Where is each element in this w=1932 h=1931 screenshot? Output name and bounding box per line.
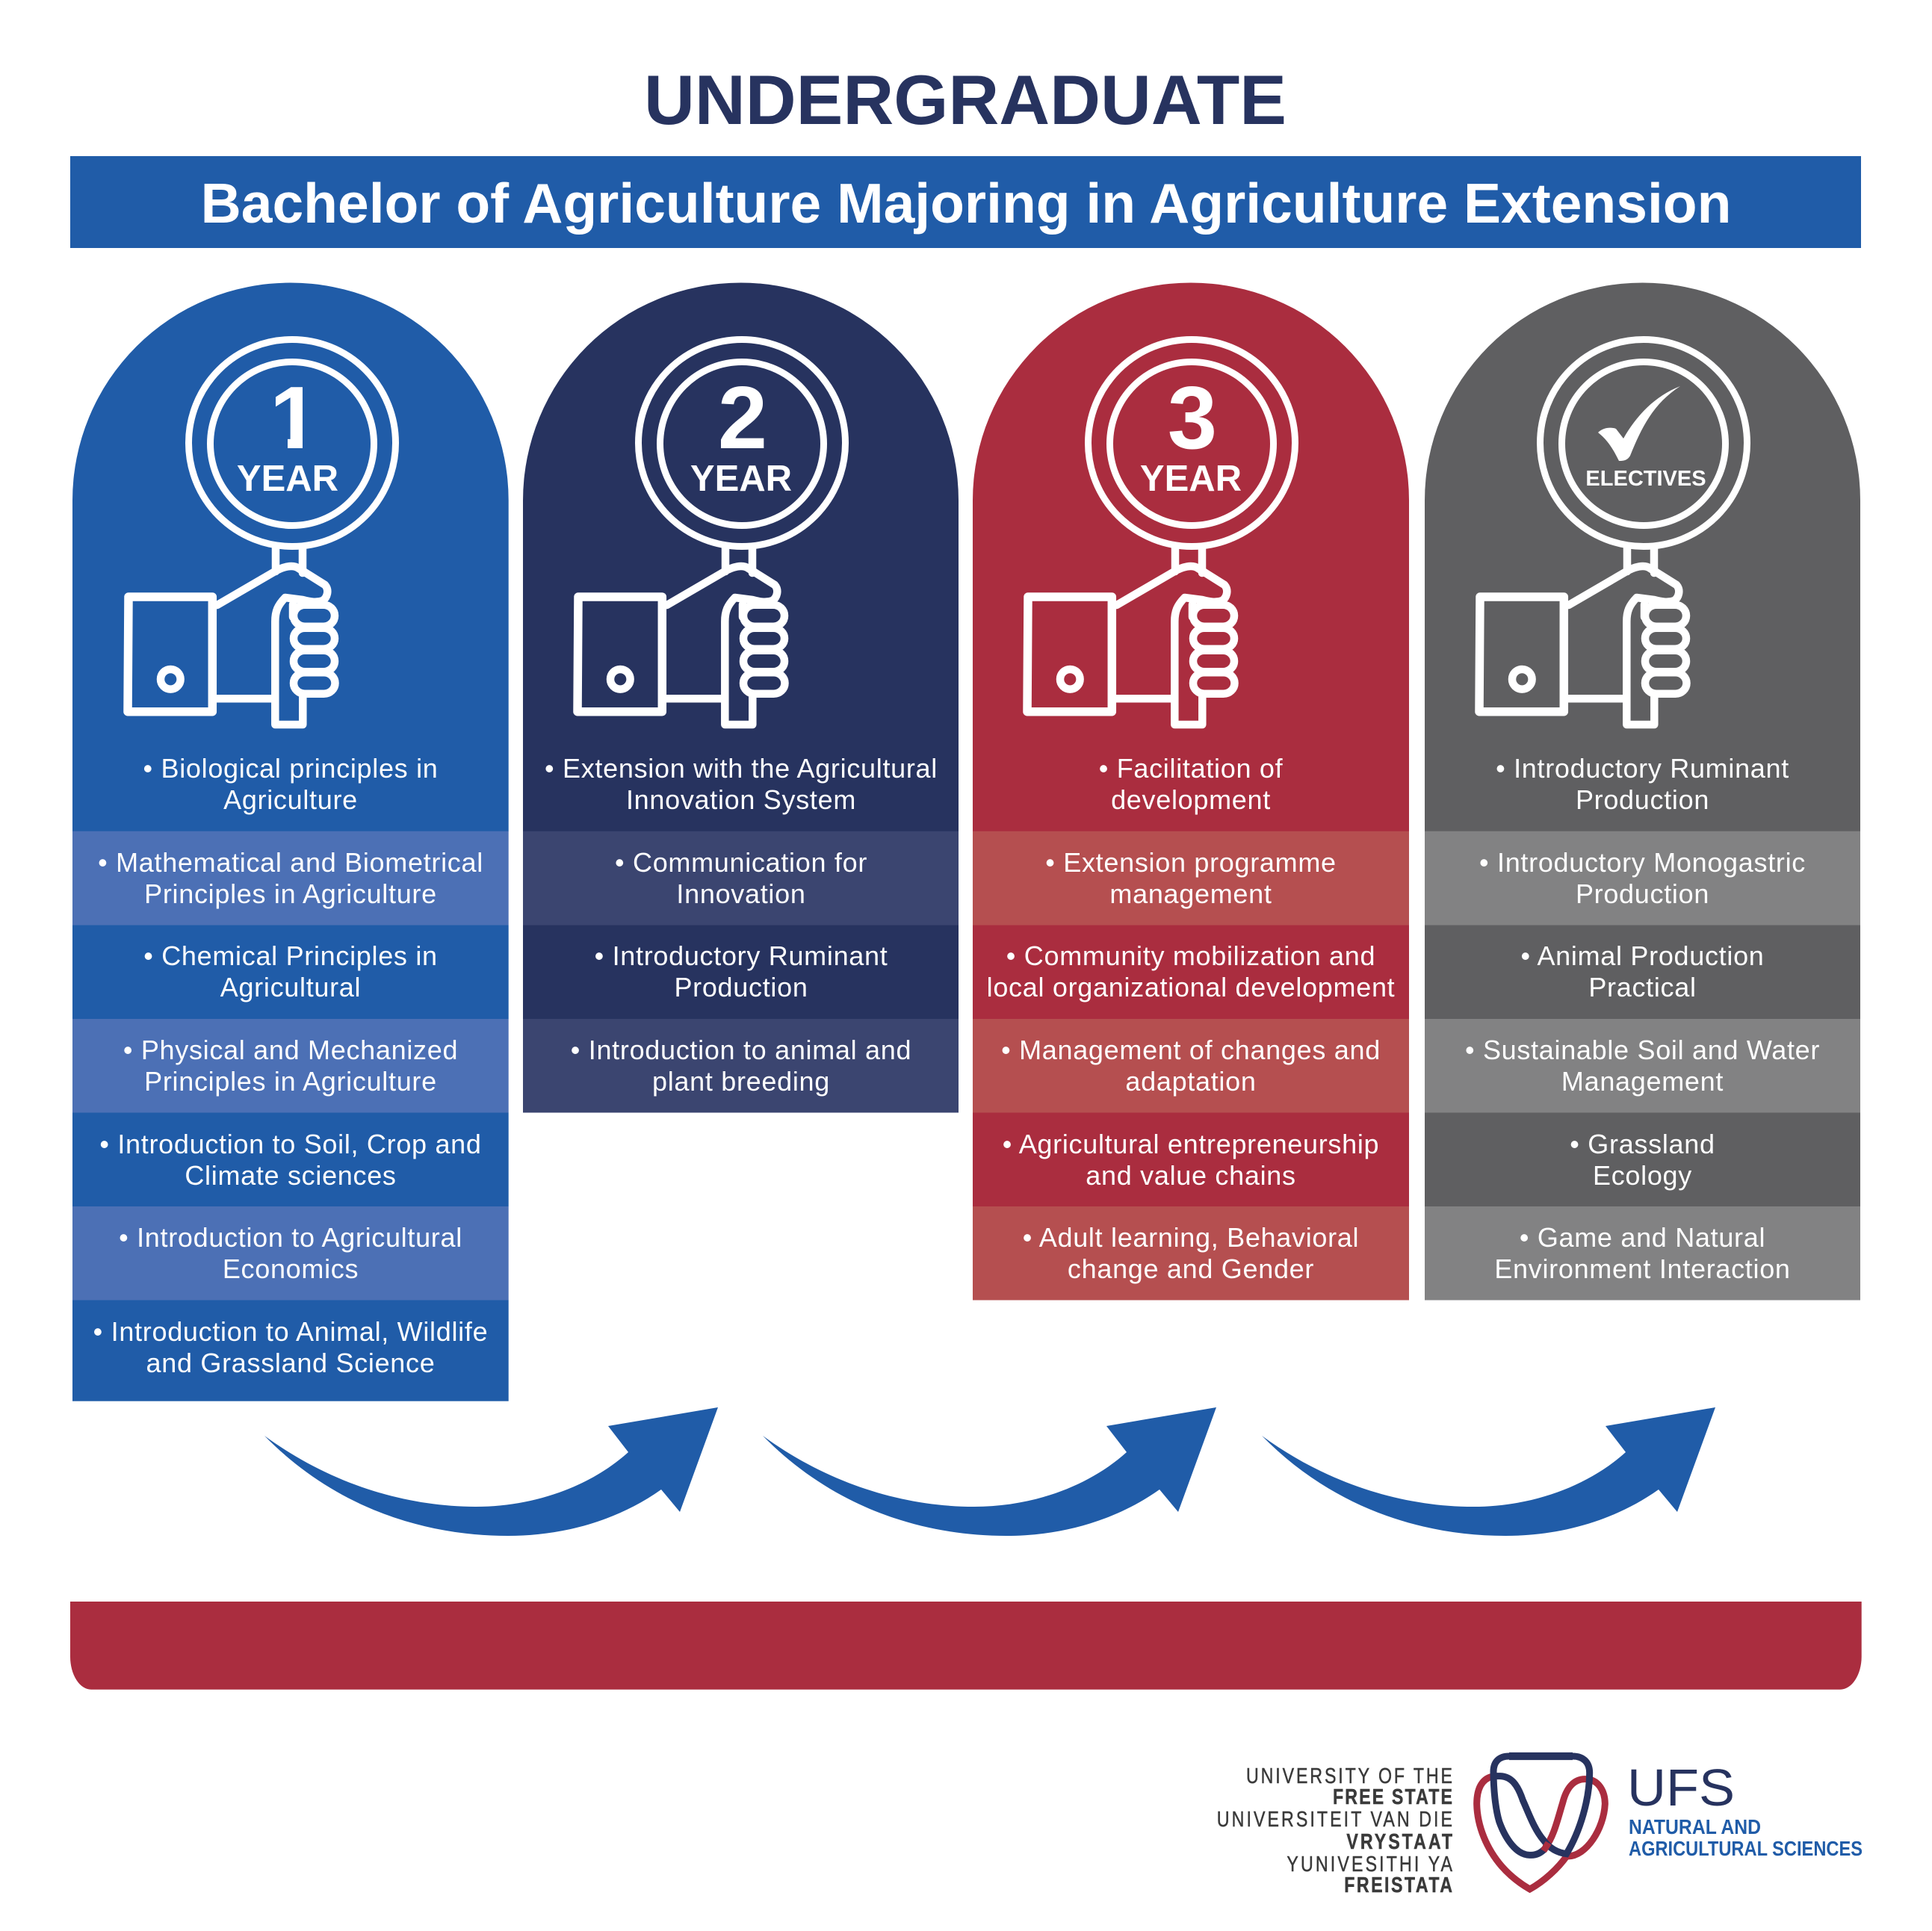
course list: year 1: Principles in Agriculture bbox=[144, 878, 437, 909]
icon: magnifier held in hand, year 2: YEAR bbox=[690, 459, 792, 499]
course list: year 1: • Introduction to Animal, Wildlife bbox=[93, 1316, 488, 1347]
icon: magnifier held in hand, year 3 bbox=[1027, 339, 1295, 725]
icon: magnifier held in hand with check mark, electives: ELECTIVES bbox=[1585, 467, 1706, 491]
icon: magnifier held in hand with check mark, electives bbox=[1479, 339, 1747, 725]
logo: faculty name: NATURAL AND bbox=[1629, 1815, 1761, 1838]
course list: electives: Environment Interaction bbox=[1494, 1253, 1791, 1284]
course list: year 3: • Management of changes and bbox=[1001, 1035, 1381, 1065]
course list: year 1 bbox=[93, 753, 488, 1378]
banner: programme name bbox=[70, 156, 1861, 248]
course list: year 2: • Communication for bbox=[615, 847, 867, 878]
course list: year 1: • Biological principles in bbox=[143, 753, 438, 784]
course list: electives: Management bbox=[1561, 1066, 1724, 1097]
logo: university name: VRYSTAAT bbox=[1346, 1829, 1452, 1854]
logo: faculty name: AGRICULTURAL SCIENCES bbox=[1629, 1837, 1863, 1860]
logo: UFS wordmark: UFS bbox=[1627, 1758, 1735, 1817]
course list: year 3: • Facilitation of bbox=[1099, 753, 1284, 784]
course list: year 1: • Mathematical and Biometrical bbox=[98, 847, 483, 878]
panel: year 3 bbox=[973, 283, 1409, 1301]
icon: magnifier held in hand, year 3: 3 bbox=[1168, 368, 1217, 468]
logo: university name bbox=[1217, 1763, 1452, 1897]
course list: year 1: Economics bbox=[223, 1253, 359, 1284]
course list: year 3: • Agricultural entrepreneurship bbox=[1003, 1129, 1379, 1159]
course list: electives: Ecology bbox=[1593, 1160, 1692, 1191]
footer bar bbox=[70, 1602, 1862, 1690]
icon: magnifier held in hand, year 3: YEAR bbox=[1140, 459, 1242, 499]
course list: electives: • Animal Production bbox=[1520, 940, 1765, 971]
course list: electives: Production bbox=[1576, 878, 1709, 909]
arrow: year 2 to year 3 bbox=[763, 1407, 1216, 1536]
course list: year 3 bbox=[987, 753, 1395, 1284]
logo: faculty name bbox=[1629, 1815, 1863, 1860]
course list: year 2 bbox=[545, 753, 938, 1097]
title: UNDERGRADUATE bbox=[644, 61, 1287, 139]
icon: magnifier held in hand, year 2 bbox=[578, 339, 846, 725]
logo: university name: YUNIVESITHI YA bbox=[1287, 1851, 1452, 1876]
arrow: year 3 to electives bbox=[1262, 1407, 1715, 1536]
course list: year 3: and value chains bbox=[1086, 1160, 1296, 1191]
banner: programme name: Bachelor of Agriculture Majoring in Agriculture Extension bbox=[201, 172, 1731, 235]
panel: electives bbox=[1425, 283, 1860, 1301]
course list: year 3: development bbox=[1111, 784, 1271, 815]
course list: electives: Practical bbox=[1588, 972, 1697, 1002]
course list: year 1: Climate sciences bbox=[185, 1160, 397, 1191]
icon: magnifier held in hand, year 1 bbox=[128, 339, 396, 725]
icon: magnifier held in hand, year 1: 1 bbox=[270, 368, 319, 468]
course list: year 2: Production bbox=[674, 972, 808, 1002]
course list: year 1: Agriculture bbox=[223, 784, 358, 815]
course list: year 1: Agricultural bbox=[220, 972, 361, 1002]
course list: year 2: • Introductory Ruminant bbox=[595, 940, 888, 971]
logo: university name: FREE STATE bbox=[1333, 1784, 1452, 1809]
course list: year 2: • Extension with the Agricultural bbox=[545, 753, 938, 784]
course list: year 1: and Grassland Science bbox=[146, 1348, 435, 1378]
course list: electives: • Grassland bbox=[1570, 1129, 1715, 1159]
course list: year 1: • Introduction to Soil, Crop and bbox=[99, 1129, 482, 1159]
icon: magnifier held in hand, year 1: YEAR bbox=[237, 459, 338, 499]
course list: year 2: Innovation bbox=[676, 878, 806, 909]
course list: year 3: • Adult learning, Behavioral bbox=[1023, 1222, 1359, 1253]
icon: magnifier held in hand, year 2: 2 bbox=[718, 368, 767, 468]
course list: year 1: Principles in Agriculture bbox=[144, 1066, 437, 1097]
course list: year 3: • Extension programme bbox=[1045, 847, 1337, 878]
course list: year 1: • Chemical Principles in bbox=[143, 940, 438, 971]
course list: year 3: change and Gender bbox=[1068, 1253, 1314, 1284]
course list: year 2: plant breeding bbox=[652, 1066, 830, 1097]
course list: electives: • Introductory Ruminant bbox=[1496, 753, 1789, 784]
arrow: year 1 to year 2 bbox=[264, 1407, 718, 1536]
course list: year 3: • Community mobilization and bbox=[1006, 940, 1375, 971]
course list: year 3: adaptation bbox=[1125, 1066, 1257, 1097]
course list: electives: • Introductory Monogastric bbox=[1479, 847, 1806, 878]
course list: year 1: • Introduction to Agricultural bbox=[119, 1222, 462, 1253]
panel: year 2 bbox=[523, 283, 959, 1113]
course list: year 3: local organizational development bbox=[987, 972, 1395, 1002]
logo: university name: UNIVERSITY OF THE bbox=[1246, 1763, 1452, 1788]
logo: UFS emblem bbox=[1477, 1756, 1605, 1889]
course list: year 2: • Introduction to animal and bbox=[571, 1035, 911, 1065]
course list: year 3: management bbox=[1109, 878, 1272, 909]
course list: year 1: • Physical and Mechanized bbox=[123, 1035, 458, 1065]
course list: electives: • Sustainable Soil and Water bbox=[1465, 1035, 1820, 1065]
logo: university name: UNIVERSITEIT VAN DIE bbox=[1217, 1806, 1452, 1832]
logo: university name: FREISTATA bbox=[1344, 1872, 1452, 1897]
course list: electives: • Game and Natural bbox=[1520, 1222, 1765, 1253]
panel: year 1 bbox=[72, 283, 509, 1401]
course list: electives bbox=[1465, 753, 1820, 1284]
course list: year 2: Innovation System bbox=[626, 784, 856, 815]
course list: electives: Production bbox=[1576, 784, 1709, 815]
